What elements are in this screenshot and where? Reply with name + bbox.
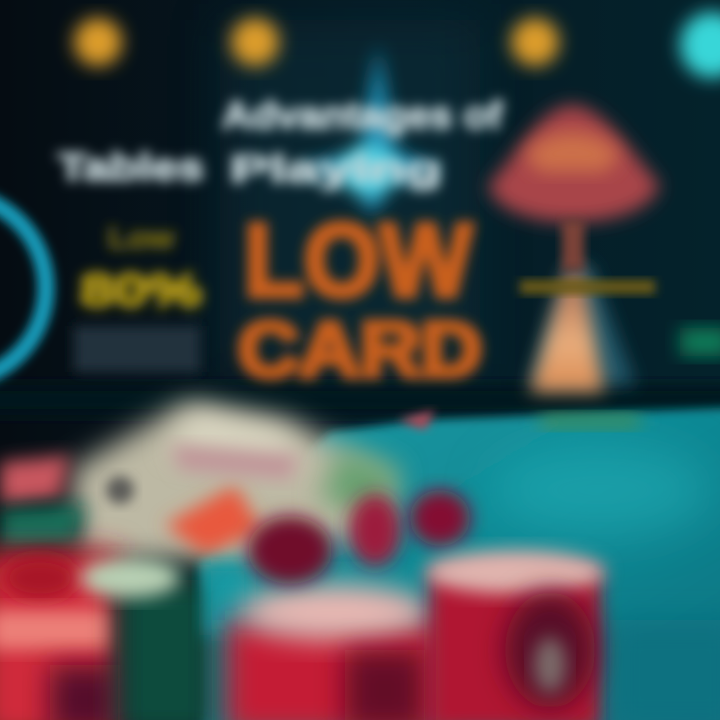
icon: mushroom lamp bbox=[488, 105, 660, 428]
stat: yellow text block bbox=[74, 222, 202, 372]
title bbox=[58, 95, 502, 191]
stat: yellow text block: 80% bbox=[80, 264, 202, 316]
heading: orange LOW CARD bbox=[238, 203, 482, 393]
icon: glowing star bbox=[300, 45, 440, 215]
heading: orange LOW CARD: CARD bbox=[238, 305, 482, 393]
title: Tables bbox=[58, 147, 204, 189]
title: Advantages of bbox=[222, 95, 502, 137]
heading: orange LOW CARD: LOW bbox=[244, 203, 473, 319]
table felt bbox=[200, 408, 720, 720]
icons: ceiling lights bbox=[74, 18, 559, 66]
poker chips bbox=[0, 490, 605, 720]
title: Playing bbox=[230, 149, 442, 191]
icon: cyan moon bbox=[680, 12, 720, 78]
playing cards bbox=[0, 405, 435, 560]
green label bbox=[680, 328, 720, 356]
icon: cyan ring at left bbox=[0, 194, 46, 382]
stat: yellow text block: Low bbox=[108, 222, 175, 255]
